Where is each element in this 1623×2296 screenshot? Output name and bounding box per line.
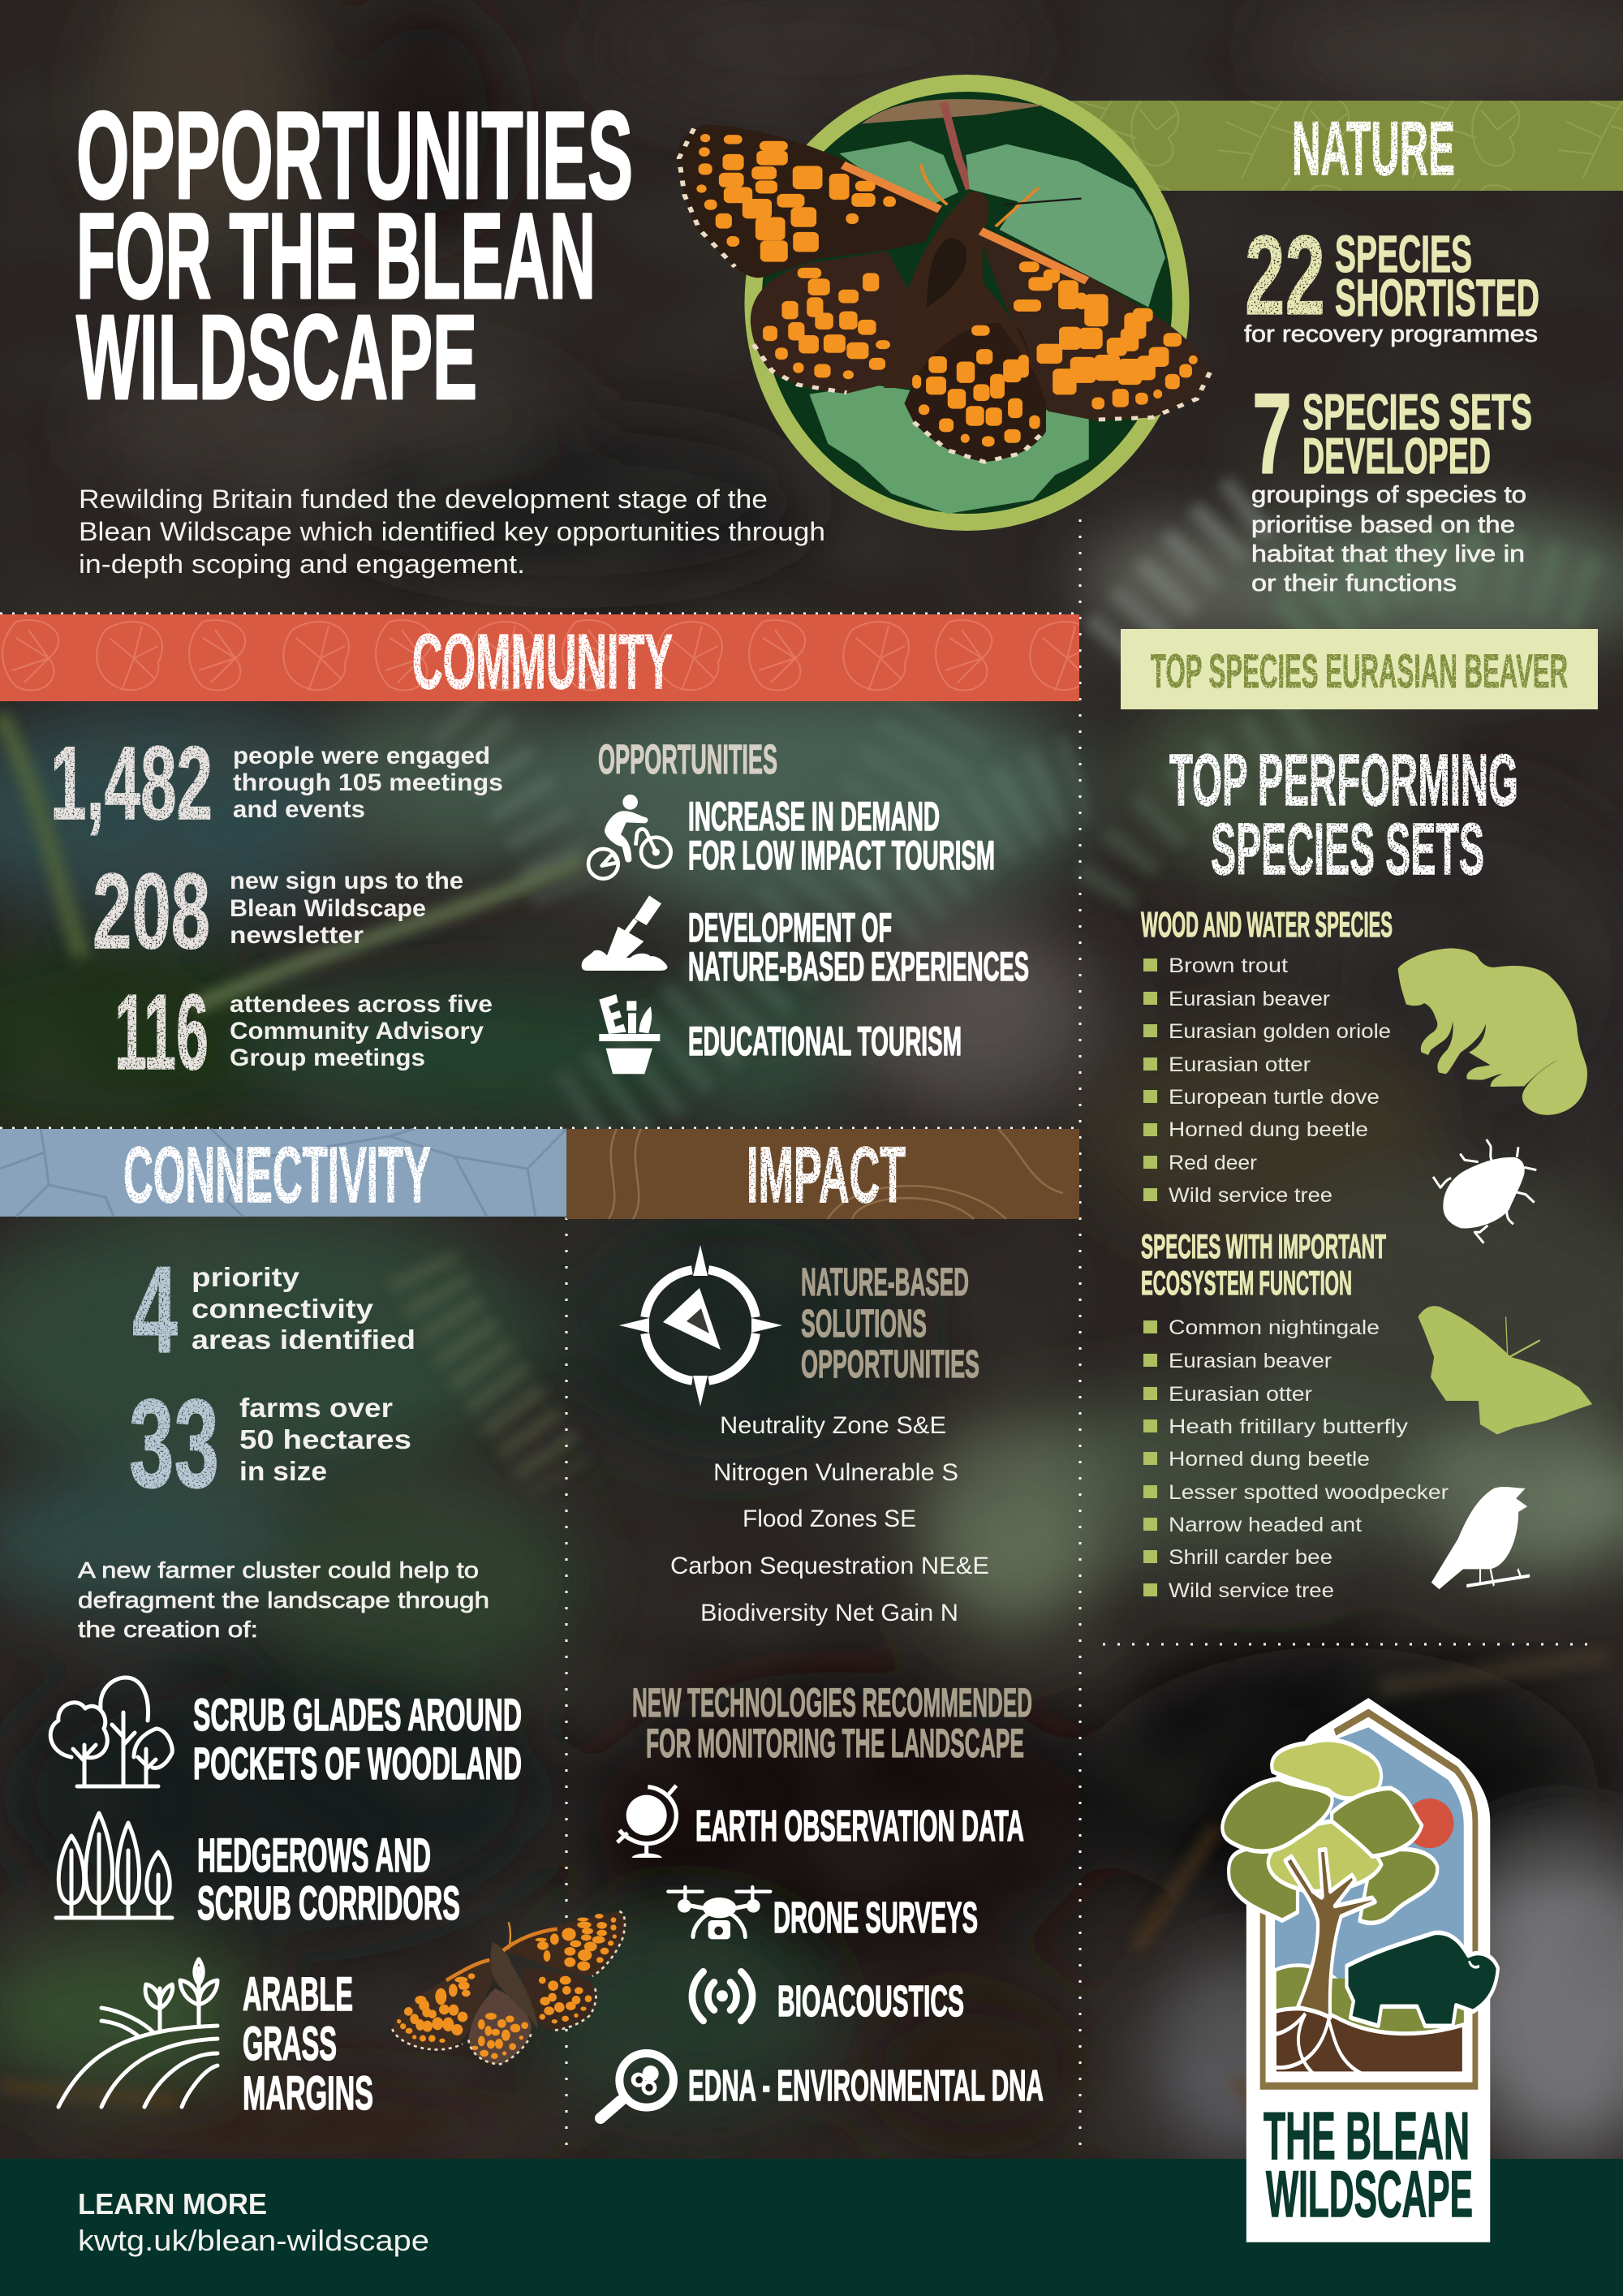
icon: magnifier with DNA	[601, 2053, 674, 2118]
panel: connectivity: GRASS	[243, 2018, 337, 2070]
panel: connectivity: priority	[192, 1262, 300, 1292]
panel: connectivity	[0, 1129, 566, 2120]
panel: impact: OPPORTUNITIES	[801, 1343, 979, 1386]
intro text	[79, 485, 825, 579]
panel: connectivity: SCRUB CORRIDORS	[197, 1877, 460, 1930]
list: wood and water species	[1141, 905, 1393, 1207]
panel: connectivity: 50 hectares	[239, 1424, 411, 1454]
list: wood and water species: Eurasian golden oriole	[1169, 1020, 1391, 1043]
list: wood and water species: Red deer	[1169, 1152, 1257, 1174]
list: wood and water species: Brown trout	[1169, 954, 1288, 977]
nature band: NATURE	[1292, 106, 1455, 191]
stat: 7 species sets	[1251, 369, 1532, 597]
panel: community: 1,482	[50, 726, 213, 842]
title	[76, 86, 633, 424]
intro text: Blean Wildscape which identified key opportunities through	[79, 517, 825, 546]
stat: 7 species sets: DEVELOPED	[1302, 429, 1491, 485]
panel: connectivity: in size	[239, 1456, 327, 1486]
list: wood and water species: European turtle dove	[1169, 1086, 1380, 1109]
panel: community: 208	[93, 851, 210, 971]
panel: connectivity: the creation of:	[78, 1617, 258, 1642]
list: wood and water species: Eurasian otter	[1169, 1053, 1311, 1076]
photo circle with butterfly	[745, 75, 1190, 531]
panel: connectivity: SCRUB GLADES AROUND	[193, 1689, 522, 1740]
list: ecosystem function species: Eurasian otter	[1169, 1383, 1312, 1406]
icon: drone	[668, 1887, 770, 1939]
panel: community: 116	[114, 972, 209, 1092]
title: FOR THE BLEAN	[76, 187, 596, 324]
panel: community: Group meetings	[230, 1045, 425, 1071]
list: ecosystem function species: Wild service tree	[1169, 1579, 1334, 1602]
icon: hedgerow	[56, 1813, 172, 1918]
stat: 22 species shortlisted: for recovery programmes	[1244, 321, 1538, 347]
panel: impact: FOR MONITORING THE LANDSCAPE	[646, 1721, 1024, 1766]
list: ecosystem function species: ECOSYSTEM FUNCTION	[1141, 1264, 1352, 1302]
list: ecosystem function species	[1141, 1227, 1449, 1602]
panel: community: people were engaged	[233, 743, 490, 769]
panel: connectivity: ARABLE	[243, 1968, 353, 2021]
panel: connectivity: MARGINS	[243, 2067, 373, 2120]
list: ecosystem function species: Shrill carder bee	[1169, 1546, 1332, 1569]
heading: top performing species sets	[1169, 740, 1518, 890]
title: WILDSCAPE	[76, 291, 477, 424]
panel: impact: Biodiversity Net Gain N	[700, 1600, 958, 1626]
panel: connectivity: HEDGEROWS AND	[197, 1829, 431, 1882]
list: ecosystem function species: Horned dung beetle	[1169, 1448, 1370, 1471]
icon: globe	[618, 1786, 676, 1858]
panel: connectivity: CONNECTIVITY	[123, 1131, 431, 1219]
stat: 22 species shortlisted	[1244, 213, 1539, 347]
list: ecosystem function species: Heath fritillary butterfly	[1169, 1415, 1409, 1438]
icon: compass	[619, 1245, 782, 1406]
panel: community: NATURE-BASED EXPERIENCES	[688, 944, 1029, 989]
panel: impact: Flood Zones SE	[743, 1506, 916, 1532]
list: ecosystem function species: Common nightingale	[1169, 1316, 1380, 1339]
title: OPPORTUNITIES	[76, 86, 633, 225]
list: wood and water species: Eurasian beaver	[1169, 988, 1330, 1010]
icon: beetle	[1433, 1139, 1536, 1243]
icon: trowel in soil	[582, 895, 668, 971]
footer bar: kwtg.uk/blean-wildscape	[78, 2224, 429, 2257]
panel: community: FOR LOW IMPACT TOURISM	[688, 833, 995, 878]
panel: community: COMMUNITY	[412, 618, 673, 705]
panel: impact: Carbon Sequestration NE&E	[670, 1553, 989, 1579]
panel: community: attendees across five	[230, 991, 493, 1018]
panel: impact: IMPACT	[747, 1131, 906, 1219]
stat: 22 species shortlisted: SPECIES	[1335, 225, 1472, 283]
logo: the blean wildscape	[1222, 1698, 1498, 2242]
panel: connectivity: areas identified	[192, 1325, 415, 1355]
panel: community: newsletter	[230, 922, 364, 949]
panel: community: INCREASE IN DEMAND	[688, 794, 940, 839]
list: ecosystem function species: Eurasian beaver	[1169, 1350, 1332, 1372]
stat: 22 species shortlisted: 22	[1245, 213, 1325, 338]
panel: impact: BIOACOUSTICS	[777, 1977, 964, 2026]
panel: impact: DRONE SURVEYS	[773, 1893, 978, 1942]
panel: impact	[566, 1129, 1079, 2118]
list: wood and water species: Wild service tree	[1169, 1184, 1332, 1207]
panel: connectivity: connectivity	[192, 1294, 374, 1324]
panel: community: and events	[233, 796, 365, 823]
stat: 7 species sets: habitat that they live in	[1251, 541, 1525, 567]
stat: 7 species sets: 7	[1252, 369, 1292, 498]
panel: impact: Nitrogen Vulnerable S	[713, 1459, 958, 1486]
panel: community: Community Advisory	[230, 1018, 484, 1045]
footer bar	[0, 2159, 1623, 2296]
panel: connectivity: defragment the landscape through	[78, 1587, 489, 1613]
stat: 7 species sets: or their functions	[1251, 571, 1457, 597]
panel: top species callout	[1121, 629, 1598, 709]
panel: connectivity: 4	[132, 1241, 178, 1379]
panel: impact: EARTH OBSERVATION DATA	[695, 1802, 1024, 1850]
nature band	[1071, 101, 1623, 191]
icon: cyclist	[588, 795, 671, 879]
list: wood and water species: Horned dung beetle	[1169, 1118, 1368, 1141]
intro text: in-depth scoping and engagement.	[79, 549, 525, 579]
panel: connectivity: POCKETS OF WOODLAND	[193, 1738, 522, 1789]
panel: connectivity: farms over	[239, 1393, 393, 1423]
list: ecosystem function species: SPECIES WITH IMPORTANT	[1141, 1227, 1386, 1265]
panel: community	[0, 614, 1079, 1092]
list: ecosystem function species: Lesser spotted woodpecker	[1169, 1481, 1449, 1504]
panel: community: through 105 meetings	[233, 769, 503, 796]
panel: community: new sign ups to the	[230, 868, 463, 894]
icon: bioacoustics	[692, 1971, 752, 2021]
icon: plant pot	[599, 994, 660, 1074]
list: ecosystem function species: Narrow headed ant	[1169, 1514, 1362, 1536]
panel: impact: EDNA - ENVIRONMENTAL DNA	[688, 2061, 1044, 2110]
panel: impact: NEW TECHNOLOGIES RECOMMENDED	[632, 1680, 1032, 1725]
intro text: Rewilding Britain funded the development stage of the	[79, 485, 768, 514]
panel: community: OPPORTUNITIES	[598, 736, 777, 782]
icon: arable field	[58, 1959, 217, 2107]
panel: community: EDUCATIONAL TOURISM	[688, 1019, 962, 1064]
panel: impact: Neutrality Zone S&E	[720, 1412, 946, 1439]
panel: community: DEVELOPMENT OF	[688, 905, 892, 950]
icon: bird silhouette	[1431, 1487, 1530, 1589]
stat: 7 species sets: prioritise based on the	[1251, 512, 1515, 538]
panel: connectivity: 33	[129, 1373, 219, 1514]
small butterfly photo	[392, 1911, 625, 2064]
panel: community: Blean Wildscape	[230, 895, 426, 922]
footer bar: LEARN MORE	[78, 2187, 267, 2221]
panel: impact: NATURE-BASED	[801, 1261, 969, 1304]
dotted section dividers	[0, 519, 1596, 2151]
panel: impact: SOLUTIONS	[801, 1303, 927, 1346]
stat: 7 species sets: groupings of species to	[1251, 482, 1526, 508]
icon: trees	[50, 1678, 172, 1786]
icon: butterfly silhouette	[1418, 1306, 1592, 1434]
icon: beaver	[1398, 948, 1587, 1115]
panel: connectivity: A new farmer cluster could help to	[78, 1557, 479, 1583]
butterfly photo	[677, 124, 1211, 462]
